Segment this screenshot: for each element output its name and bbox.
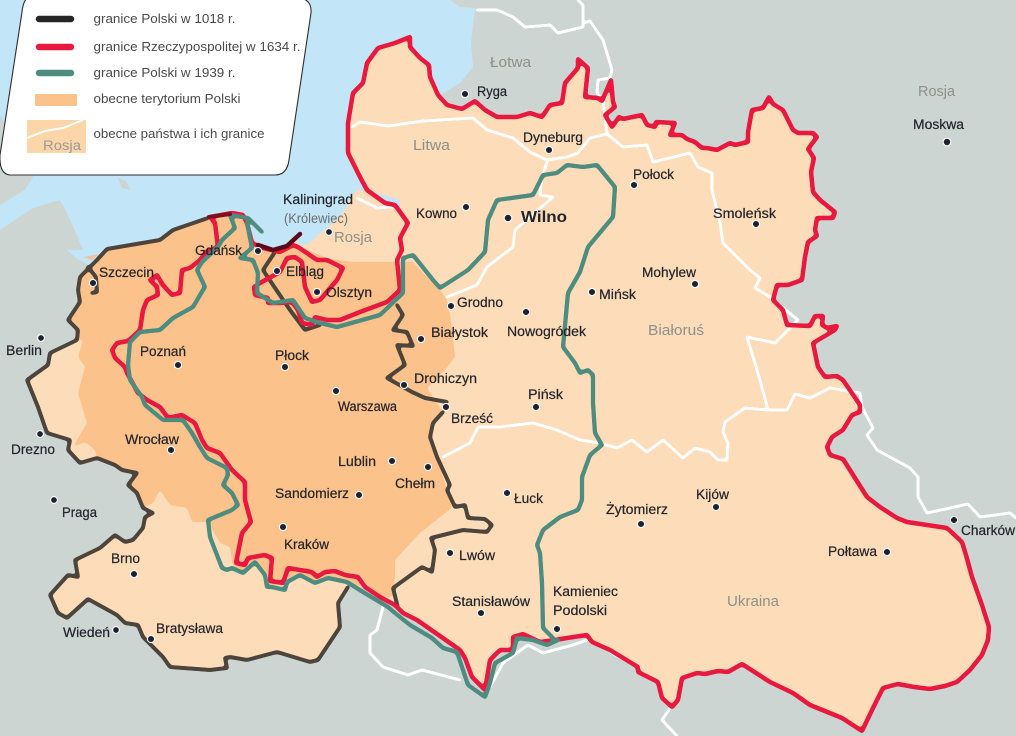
city: Drohiczyn: [400, 371, 477, 389]
city: Wiedeń: Wiedeń: [63, 625, 110, 640]
city: Kamieniec Podolski: Kamieniec: [553, 584, 618, 599]
city: Bratysława: Bratysława: [156, 621, 223, 636]
city: Kaliningrad: Kaliningrad: [283, 192, 353, 207]
city: Ryga: [461, 84, 507, 99]
city: Charków: Charków: [961, 523, 1015, 538]
city: Dyneburg: Dyneburg: [523, 130, 583, 145]
city: Kraków: [279, 523, 329, 552]
city: Mohylew: [642, 265, 699, 288]
city: Pińsk: Pińsk: [528, 387, 563, 402]
city: Pińsk: [528, 387, 563, 411]
city: Charków: [950, 516, 1015, 538]
label: Litwa: Litwa: [413, 138, 451, 154]
city: Dyneburg: [523, 130, 583, 154]
Szczecin lagoon: [67, 250, 103, 267]
city: Żytomierz: [606, 502, 668, 528]
city: Poznań: Poznań: [140, 344, 186, 359]
city: Mińsk: Mińsk: [599, 287, 636, 302]
city: Białystok: [417, 325, 488, 343]
city: Kraków: Kraków: [284, 537, 329, 552]
city: Warszawa: Warszawa: [338, 399, 397, 414]
city: Drohiczyn: Drohiczyn: [414, 371, 477, 386]
label: Białoruś: Białoruś: [648, 323, 704, 339]
city: Wrocław: Wrocław: [125, 432, 179, 447]
legend: present Poland: obecne terytorium Polski: [94, 91, 241, 106]
legend: border 1939: granice Polski w 1939 r.: [94, 65, 236, 80]
city: Mohylew: Mohylew: [642, 265, 696, 280]
city: Lwów: Lwów: [459, 548, 495, 563]
city: Poznań: [140, 344, 186, 369]
legend: present states: Rosja: [43, 137, 81, 153]
city: Chełm: Chełm: [395, 476, 435, 491]
city: Elbląg: Elbląg: [286, 264, 324, 279]
city: Praga: Praga: [62, 505, 97, 520]
city: Kijów: [696, 487, 729, 511]
city: Kowno: [416, 203, 470, 221]
legend: border 1018: granice Polski w 1018 r.: [94, 11, 236, 26]
city: Stanisławów: Stanisławów: [452, 594, 530, 609]
city: Kaliningrad: (Królewiec): [284, 211, 348, 226]
city: Gdańsk: [195, 243, 262, 258]
city: Brześć: [442, 403, 493, 426]
legend: present states: [27, 120, 264, 153]
border of Poland in 1939: [128, 165, 615, 697]
city: Grodno: Grodno: [457, 295, 503, 310]
city: Smoleńsk: Smoleńsk: [713, 206, 776, 221]
label: Ukraina: Ukraina: [727, 594, 780, 610]
city: Wilno: [504, 209, 567, 226]
city: Smoleńsk: [713, 206, 776, 228]
city: Lublin: [338, 454, 396, 469]
city: Łuck: Łuck: [514, 491, 543, 506]
city: Drezno: Drezno: [11, 442, 55, 457]
city: Kamieniec Podolski: Podolski: [553, 603, 607, 618]
city: Warszawa: [332, 387, 397, 414]
city: Szczecin: [89, 265, 154, 287]
city: Olsztyn: Olsztyn: [326, 285, 372, 300]
city: Lublin: Lublin: [338, 454, 376, 469]
city: Berlin: [6, 335, 44, 358]
legend box: [0, 0, 311, 175]
city: Wilno: Wilno: [521, 209, 567, 226]
land: Sweden and island: [0, 115, 131, 205]
legend: [0, 0, 311, 175]
city: Połock: Połock: [633, 167, 674, 182]
city: Praga: [51, 497, 97, 520]
city: Kamieniec Podolski: [553, 584, 618, 633]
city: Drezno: [11, 431, 55, 457]
city: Brno: [111, 551, 140, 578]
label: Rosja east: Rosja: [918, 84, 956, 100]
legend: present Poland: [35, 91, 241, 106]
city: Białystok: Białystok: [431, 325, 488, 340]
city: Chełm: [395, 463, 435, 491]
city: Stanisławów: [452, 594, 530, 617]
city: Kijów: Kijów: [696, 487, 729, 502]
city: Kaliningrad: [283, 192, 353, 235]
city: Berlin: Berlin: [6, 343, 42, 358]
city: Moskwa: Moskwa: [913, 117, 965, 132]
border of 1018 along Hel coast: [209, 214, 230, 217]
Vistula lagoon: [296, 233, 318, 246]
city: Kowno: Kowno: [416, 206, 457, 221]
city: Brno: Brno: [111, 551, 140, 566]
city: Moskwa: [913, 117, 965, 146]
legend: border 1634: granice Rzeczypospolitej w 1634 r.: [94, 39, 300, 54]
border of Poland in 1018: [27, 218, 492, 670]
city: Bratysława: [147, 621, 223, 643]
present territory of Poland: [68, 213, 455, 597]
city: Brześć: Brześć: [451, 411, 493, 426]
label: Łotwa: Łotwa: [490, 55, 532, 71]
city: Płock: [275, 348, 309, 371]
city: Gdańsk: Gdańsk: [195, 243, 242, 258]
legend: present states: obecne państwa i ich granice: [94, 126, 264, 141]
city: Ryga: Ryga: [477, 84, 507, 99]
city: Nowogródek: Nowogródek: [507, 324, 586, 339]
border of 1018 along the Vistula Lagoon coast: [258, 234, 300, 250]
city: Wrocław: [125, 432, 179, 454]
city: Szczecin: Szczecin: [99, 265, 154, 280]
city: Połock: [630, 167, 674, 189]
present state borders: [352, 0, 1016, 736]
city: Łuck: [503, 489, 543, 506]
city: Połtawa: Połtawa: [828, 544, 877, 559]
city: Nowogródek: [507, 308, 586, 339]
city: Płock: Płock: [275, 348, 309, 363]
city: Sandomierz: Sandomierz: [275, 486, 349, 501]
Szczecin lagoon spit: [83, 254, 100, 260]
city: Żytomierz: Żytomierz: [606, 502, 668, 517]
label: Rosja Kaliningrad: Rosja: [334, 230, 373, 246]
